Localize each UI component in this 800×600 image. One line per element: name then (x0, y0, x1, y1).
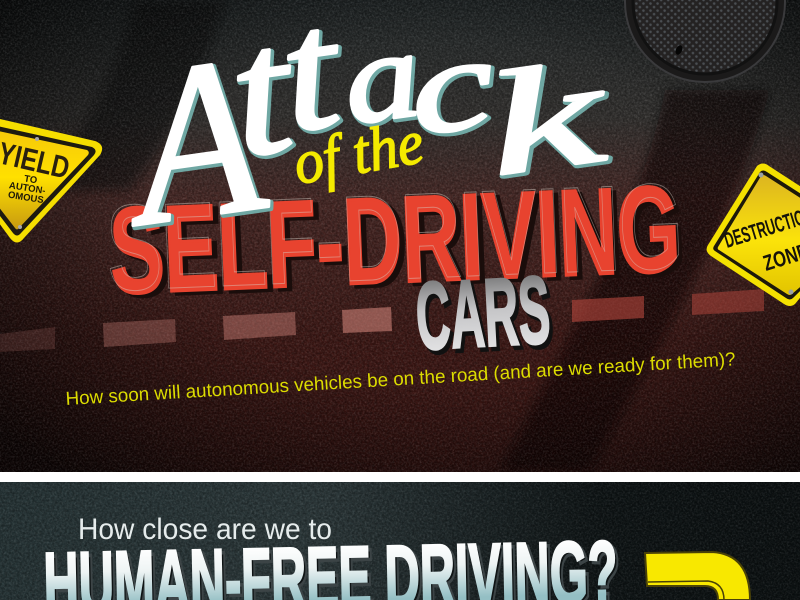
icon: yield sign (0, 112, 102, 242)
subtitle: How soon will autonomous vehicles be on the road (and are we ready for them)? (65, 349, 736, 410)
letter shadows: c (402, 12, 505, 166)
heading: cars: CARS (413, 257, 553, 370)
arrow: yellow road turn (645, 552, 750, 600)
heading: attack (105, 0, 619, 276)
panel: human-free driving section (0, 482, 800, 600)
divider band (0, 472, 800, 482)
heading: cars: CARS (416, 260, 556, 374)
letter faces: c (400, 10, 503, 164)
panel: hero road background (0, 0, 800, 472)
tire track: left (40, 0, 225, 190)
heading: human-free driving (46, 540, 618, 600)
letter shadows (107, 0, 619, 276)
heading: of the: of the (289, 108, 428, 198)
letter shadows: k (479, 31, 619, 209)
sign label: to autonomous: OMOUS (7, 190, 44, 206)
letter faces: k (477, 29, 617, 207)
letter faces: a (335, 3, 428, 151)
letter faces (105, 0, 617, 274)
letter shadows: a (337, 5, 430, 153)
icon: manhole cover (625, 0, 785, 82)
tire track: right (500, 90, 770, 472)
icon: destruction zone sign (707, 164, 800, 306)
sign label: to autonomous: TO (23, 173, 38, 186)
lane markings (0, 289, 764, 352)
heading: cars (413, 256, 556, 374)
sign label: to autonomous: AUTON- (8, 180, 46, 197)
text: how close are we to: How close are we to (78, 513, 332, 546)
letter shadows: A (107, 9, 279, 276)
letter faces: A (105, 7, 277, 274)
